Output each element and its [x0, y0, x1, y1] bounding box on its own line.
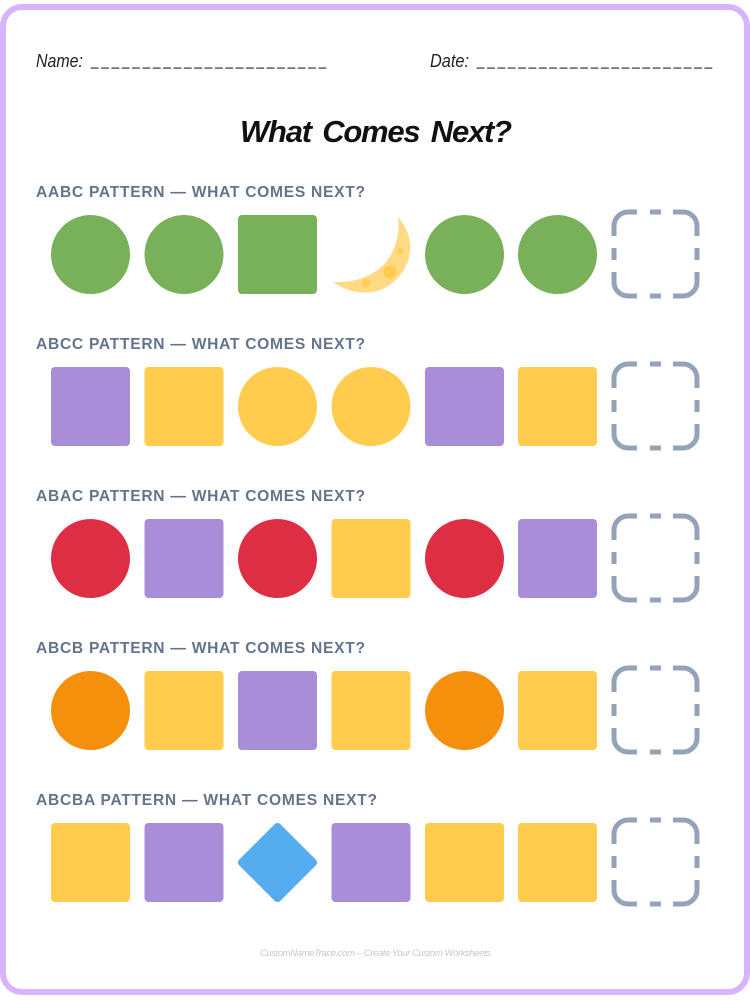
- circle: [51, 671, 130, 750]
- title: What Comes Next?: [240, 114, 512, 149]
- square: [518, 519, 597, 598]
- empty answer slot: [614, 364, 697, 448]
- square: [144, 367, 224, 446]
- empty answer slot: [614, 212, 697, 296]
- footer credit: CustomNameTrace.com – Create Your Custom Worksheets: [260, 948, 491, 959]
- name field: _______________________: [90, 54, 327, 69]
- circle: [332, 367, 410, 446]
- empty answer slot: [614, 516, 697, 600]
- row 2: ABCC pattern: [36, 336, 697, 448]
- square: [51, 823, 130, 902]
- empty answer slot: [614, 820, 697, 904]
- circle: [238, 519, 317, 598]
- row 1: AABC pattern: [36, 184, 697, 296]
- name field: [36, 50, 327, 71]
- row 3: ABAC pattern: [36, 488, 697, 600]
- diamond: [242, 827, 313, 898]
- square: [518, 823, 597, 902]
- circle: [51, 519, 130, 598]
- circle: [51, 215, 130, 294]
- date field: _______________________: [476, 54, 713, 69]
- square: [425, 367, 504, 446]
- circle: [425, 519, 504, 598]
- date field: Date:: [430, 50, 469, 71]
- circle: [144, 215, 224, 294]
- square: [51, 367, 130, 446]
- circle: [425, 215, 504, 294]
- icon: crescent moon: [333, 217, 410, 293]
- square: [518, 671, 597, 750]
- circle: [238, 367, 317, 446]
- square: [144, 519, 224, 598]
- row 3 heading: ABAC PATTERN — WHAT COMES NEXT?: [36, 488, 365, 505]
- square: [425, 823, 504, 902]
- row 5 heading: ABCBA PATTERN — WHAT COMES NEXT?: [36, 792, 377, 809]
- row 2 heading: ABCC PATTERN — WHAT COMES NEXT?: [36, 336, 365, 353]
- square: [332, 823, 410, 902]
- square: [332, 519, 410, 598]
- circle: [425, 671, 504, 750]
- square: [518, 367, 597, 446]
- name field: Name:: [36, 50, 83, 71]
- square: [144, 823, 224, 902]
- square: [332, 671, 410, 750]
- empty answer slot: [614, 668, 697, 752]
- row 1 heading: AABC PATTERN — WHAT COMES NEXT?: [36, 184, 365, 201]
- square: [238, 215, 317, 294]
- row 5: ABCBA pattern: [36, 792, 697, 904]
- square: [144, 671, 224, 750]
- square: [238, 671, 317, 750]
- date field: [430, 50, 713, 71]
- circle: [518, 215, 597, 294]
- row 4 heading: ABCB PATTERN — WHAT COMES NEXT?: [36, 640, 365, 657]
- row 4: ABCB pattern: [36, 640, 697, 752]
